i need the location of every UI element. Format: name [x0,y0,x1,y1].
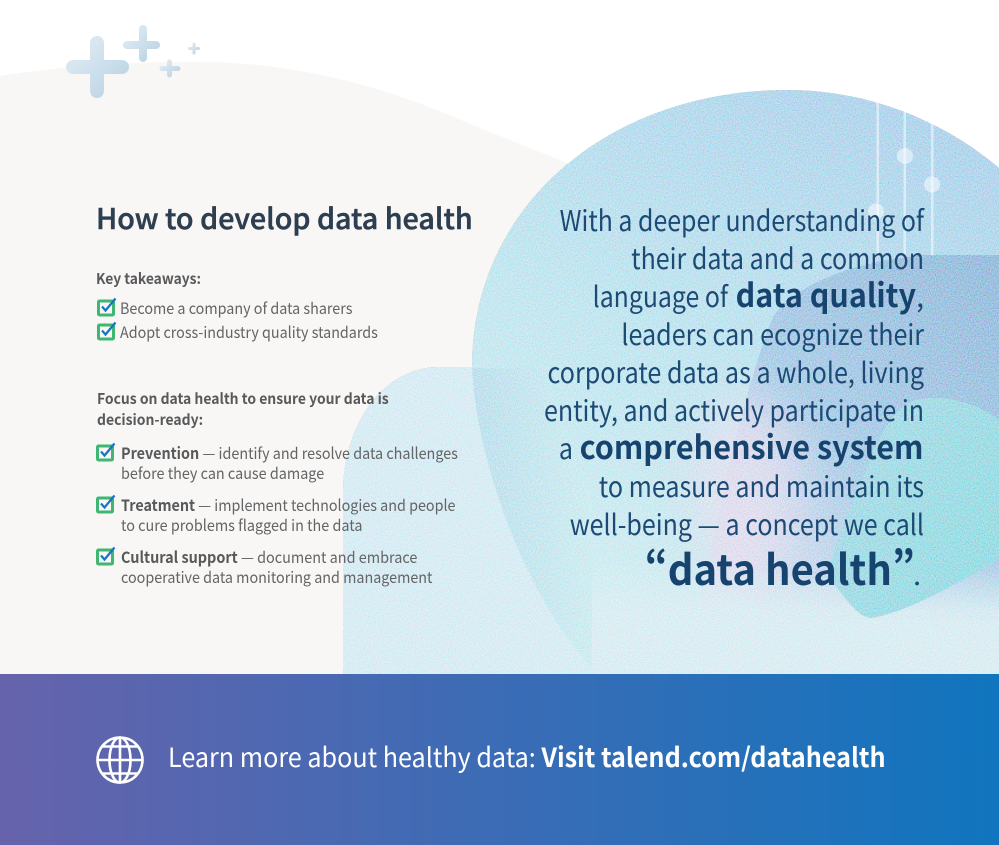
key takeaways list [96,269,378,343]
prevention item: before they can cause damage [121,462,324,484]
key takeaways list: Become a company of data sharers [120,297,352,319]
callout statement: a [559,426,573,467]
focus subheading: Focus on data health to ensure your data is [97,388,389,409]
callout statement: to measure and maintain its [599,464,924,505]
icon: checkbox [98,444,114,460]
callout statement: leaders can ecognize their [621,312,925,353]
prevention item [98,442,458,484]
icon: checkbox [98,496,114,512]
callout statement: With a deeper understanding of [560,198,925,240]
focus subheading: decision-ready: [97,409,203,430]
focus subheading [97,388,389,430]
key takeaways list: Adopt cross-industry quality standards [120,321,378,343]
background wave panel [0,62,590,674]
gradient blob illustration [343,90,999,674]
treatment item: to cure problems flagged in the data [121,514,362,536]
cultural support item: cooperative data monitoring and management [121,566,433,588]
callout statement: corporate data as a whole, living [548,350,924,391]
callout statement [544,198,925,597]
treatment item: Treatment — implement technologies and people [121,494,455,516]
callout statement: language of [593,274,729,316]
icon: globe [98,738,142,782]
callout statement: . [913,553,921,594]
callout statement: their data and a common [631,236,924,277]
callout statement: “data health” [645,536,915,597]
callout statement: comprehensive system [580,422,924,469]
icon: checkbox [98,548,114,564]
icon: checkbox [98,322,116,339]
footer call to action: Learn more about healthy data: Visit talend.com/datahealth [168,737,886,775]
icon: checkbox [98,298,116,315]
decorative plus icons [66,25,200,98]
key takeaways list: Key takeaways: [96,269,201,289]
callout statement: entity, and actively participate in [544,388,924,429]
callout statement: data quality [736,270,916,317]
footer band [0,674,999,845]
heading: How to develop data health [96,197,473,238]
decorative vertical slider lines [868,100,940,255]
prevention item: Prevention — identify and resolve data challenges [121,442,458,464]
treatment item [98,494,455,536]
callout statement: well-being — a concept we call [570,502,924,543]
cultural support item [98,546,433,588]
callout statement: , [916,275,924,316]
cultural support item: Cultural support — document and embrace [121,546,417,568]
